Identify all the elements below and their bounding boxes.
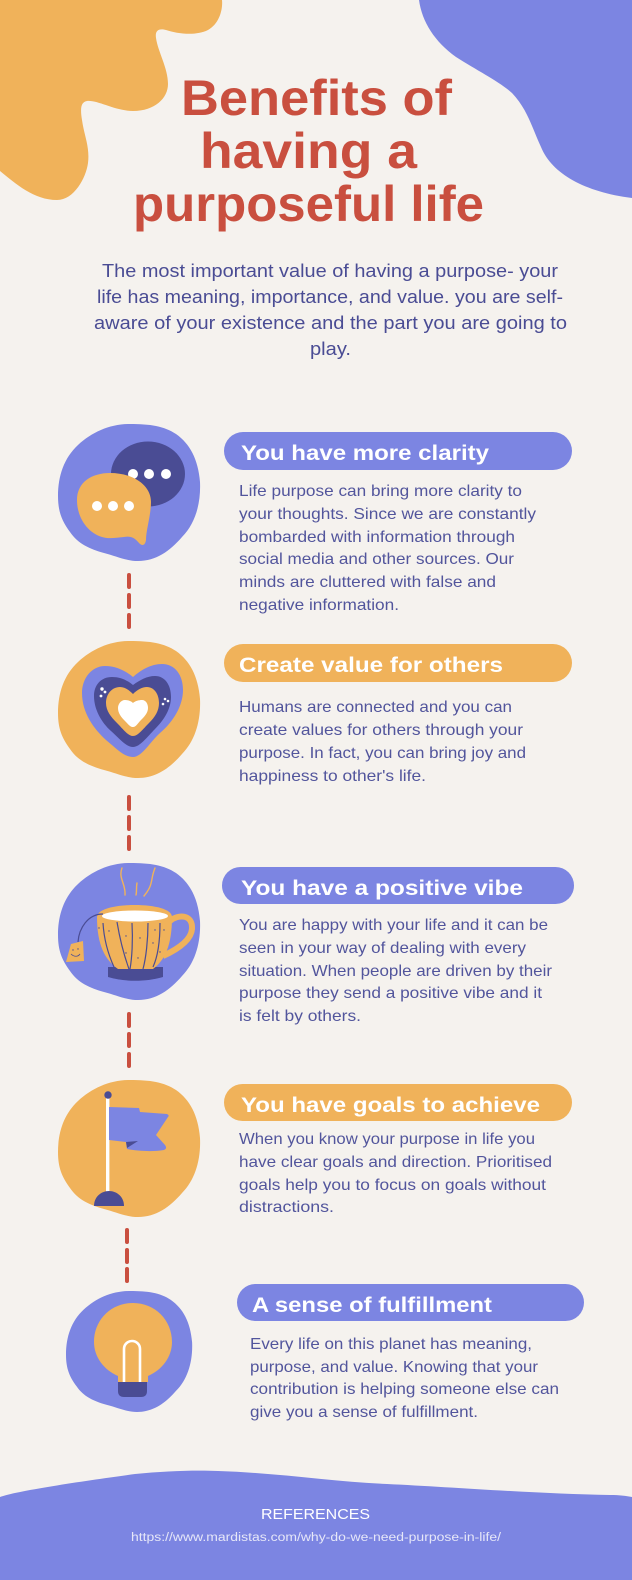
connector 3 [127,1012,131,1068]
title: having a [200,123,418,179]
panel: value [224,644,572,785]
panel: goals: You have goals to achieve [241,1094,540,1117]
panel: fulfillment: contribution is helping someone else can [250,1381,559,1398]
panel: clarity [224,432,572,614]
panel: positive vibe: purpose they send a positive vibe and it [239,985,543,1002]
panel: value: Create value for others [239,654,503,677]
panel: goals: distractions. [239,1199,334,1216]
icon: flag [58,1080,200,1217]
icon: heart [58,641,200,778]
intro text: life has meaning, importance, and value. you are self- [97,286,563,307]
panel: clarity: bombarded with information through [239,529,515,546]
intro text [94,260,567,359]
intro text: aware of your existence and the part you are going to [94,312,567,333]
icon: light bulb [66,1291,192,1412]
connector 1 [127,573,131,629]
panel: goals: When you know your purpose in life you [239,1131,535,1148]
panel: positive vibe: You are happy with your life and it can be [239,917,548,934]
panel: fulfillment: Every life on this planet has meaning, [250,1336,532,1353]
references: https://www.mardistas.com/why-do-we-need-purpose-in-life/ [131,1532,502,1544]
icon: speech bubbles [58,424,200,561]
panel: fulfillment [237,1284,584,1421]
panel: positive vibe: seen in your way of dealing with every [239,940,526,957]
title: Benefits of [181,70,452,126]
panel: fulfillment: A sense of fulfillment [252,1294,492,1317]
panel: clarity: You have more clarity [241,442,489,465]
references: REFERENCES [261,1507,370,1523]
references [131,1507,502,1544]
decorative orange blob top left [0,0,222,200]
title [133,70,484,232]
panel: value: create values for others through your [239,722,524,739]
icon: tea cup [58,863,200,1000]
panel: value: happiness to other's life. [239,768,426,785]
panel: goals [224,1084,572,1216]
panel: positive vibe [222,867,574,1025]
panel: clarity: social media and other sources. Our [239,551,515,568]
panel: value: Humans are connected and you can [239,699,512,716]
panel: fulfillment: purpose, and value. Knowing that your [250,1359,539,1376]
connector 4 [125,1228,129,1283]
title: purposeful life [133,176,484,232]
panel: clarity: Life purpose can bring more clarity to [239,483,522,500]
panel: goals: have clear goals and direction. Prioritised [239,1154,552,1171]
panel: goals: goals help you to focus on goals without [239,1177,547,1194]
decorative blue blob top right [419,0,632,198]
panel: positive vibe: You have a positive vibe [241,877,523,900]
panel: fulfillment: give you a sense of fulfillment. [250,1404,478,1421]
intro text: The most important value of having a purpose- your [102,260,558,281]
connector 2 [127,795,131,851]
panel: positive vibe: is felt by others. [239,1008,361,1025]
panel: value: purpose. In fact, you can bring joy and [239,745,526,762]
panel: clarity: minds are cluttered with false and [239,574,496,591]
panel: clarity: your thoughts. Since we are constantly [239,506,536,523]
panel: positive vibe: situation. When people are driven by their [239,963,553,980]
panel: clarity: negative information. [239,597,399,614]
intro text: play. [310,338,351,359]
footer wave [0,1471,632,1580]
